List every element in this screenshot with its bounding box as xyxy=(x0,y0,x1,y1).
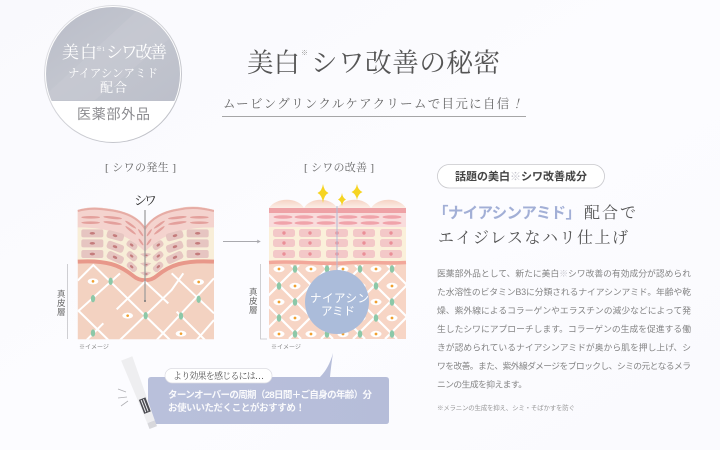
diagram: wrinkled skin cross-section: シワ xyxy=(134,193,157,208)
niacinamide circle xyxy=(305,270,369,334)
body text: 生したシワにアプローチします。コラーゲンの生成を促進する働 xyxy=(437,323,691,334)
diagram: wrinkled skin cross-section: 皮 xyxy=(57,298,66,308)
diagram: wrinkled skin cross-section xyxy=(57,193,214,351)
niacinamide circle: アミド xyxy=(321,306,355,318)
heading: niacinamide: 「ナイアシンアミド」 xyxy=(433,204,581,222)
body text xyxy=(437,268,691,390)
image note: ※イメージ xyxy=(271,344,301,351)
niacinamide action line xyxy=(336,206,338,272)
body text: 医薬部外品として、新たに美白※シワ改善の有効成分が認められ xyxy=(437,268,691,278)
arrow between diagrams xyxy=(223,240,260,243)
subtitle with underline: ムービングリンクルケアクリームで目元に自信！ xyxy=(223,97,523,111)
pill heading: featured ingredient xyxy=(438,164,604,188)
dermis bracket and label: 層 xyxy=(249,305,258,315)
badge: quasi-drug whitening and wrinkle care: ナイアシンアミド xyxy=(68,67,158,80)
footnote: ※メラニンの生成を抑え、シミ・そばかすを防ぐ xyxy=(437,403,575,412)
title: シワ改善の秘密 xyxy=(311,48,500,78)
diagram: wrinkled skin cross-section: 真 xyxy=(57,289,66,299)
badge: quasi-drug whitening and wrinkle care: ※1 xyxy=(96,46,105,53)
icon: product tube xyxy=(118,356,159,430)
icon: yellow sparkles xyxy=(318,184,362,206)
diagram: improved skin cross-section xyxy=(249,184,406,349)
heading: niacinamide: 配合で xyxy=(584,204,636,222)
diagram: wrinkled skin cross-section: 層 xyxy=(57,307,66,317)
niacinamide circle: ナイアシン xyxy=(310,292,369,305)
dermis bracket and label: 皮 xyxy=(249,296,258,306)
body text: ニンの生成を抑えます。 xyxy=(437,378,527,390)
heading: niacinamide: エイジレスなハリ仕上げ xyxy=(438,229,628,247)
label: wrinkle formation: [ シワの発生 ] xyxy=(105,160,176,174)
callout tab: より効果を感じるには… xyxy=(173,370,264,381)
badge: quasi-drug whitening and wrinkle care: シワ改善 xyxy=(106,43,167,62)
pill heading: featured ingredient: 話題の美白※シワ改善成分 xyxy=(455,169,587,183)
callout: usage advice: ターンオーバーの周期（28日間＋ご自身の年齢）分 xyxy=(168,389,372,401)
badge: quasi-drug whitening and wrinkle care: 配合 xyxy=(100,80,127,95)
diagram: wrinkled skin cross-section: ※イメージ xyxy=(79,344,109,351)
badge: quasi-drug whitening and wrinkle care: 美白 xyxy=(62,43,97,62)
body text: きが認められているナイアシンアミドが奥から肌を押し上げ、シ xyxy=(437,342,691,352)
epidermis domes xyxy=(269,200,406,208)
badge: quasi-drug whitening and wrinkle care xyxy=(44,5,182,143)
body text: た水溶性のビタミンB3に分類されるナイアシンアミド。年齢や乾 xyxy=(437,286,691,297)
label: wrinkle improvement: [ シワの改善 ] xyxy=(304,160,374,174)
badge: quasi-drug whitening and wrinkle care: 医薬部外品 xyxy=(77,106,150,122)
callout tab xyxy=(165,368,272,383)
dermis bracket and label xyxy=(249,264,267,339)
title: 美白 xyxy=(247,48,300,78)
body text: 燥、紫外線によるコラーゲンやエラスチンの減少などによって発 xyxy=(437,304,691,316)
title: ※ xyxy=(301,49,308,57)
body text: ワを改善。また、紫外線ダメージをブロックし、シミの元となるメラ xyxy=(437,360,691,371)
callout: usage advice: お使いいただくことがおすすめ！ xyxy=(168,402,305,414)
callout: usage advice xyxy=(148,353,389,424)
layers xyxy=(268,208,406,339)
dermis bracket and label: 真 xyxy=(249,287,258,297)
heading: niacinamide xyxy=(433,204,636,247)
